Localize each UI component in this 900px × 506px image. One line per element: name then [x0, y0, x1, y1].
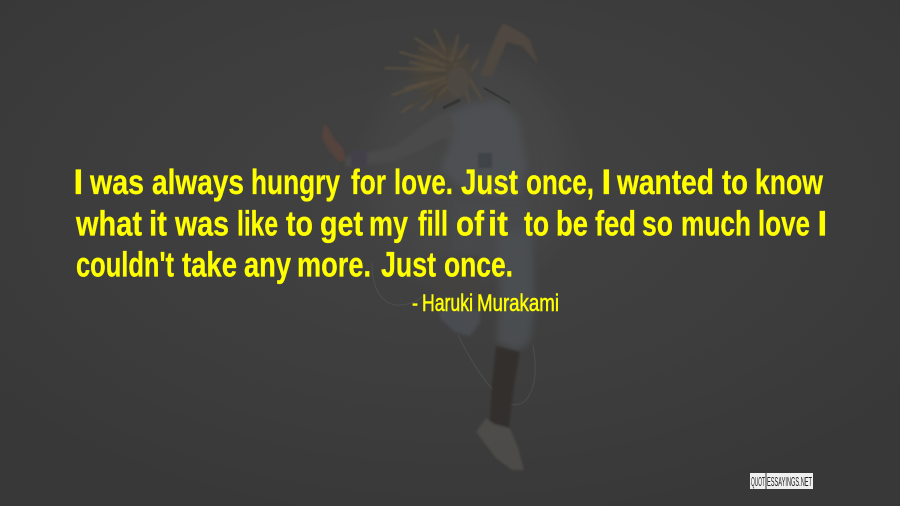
watermark logo: [750, 473, 813, 489]
soft glow behind dancer: [370, 55, 570, 285]
line 1: I: [602, 163, 611, 202]
line 1: for: [351, 163, 386, 202]
left arm: [345, 112, 456, 167]
figure: jumping dancer: [322, 23, 570, 470]
jump rope: [372, 262, 535, 405]
line 2: like: [237, 204, 278, 244]
line 2: so: [642, 204, 673, 244]
line 3: Just: [381, 246, 436, 284]
line 2: much: [681, 204, 751, 244]
line 2: was: [174, 204, 229, 244]
attribution: -: [412, 290, 418, 317]
line 2: fed: [595, 204, 636, 244]
line 2: to: [524, 204, 549, 244]
line 3: more.: [297, 246, 371, 284]
line 3: couldn't: [76, 246, 174, 284]
shorts: right: [497, 228, 535, 351]
wristband: [351, 150, 367, 166]
quote text: [74, 163, 827, 284]
hip: [450, 198, 532, 262]
line 2: my: [369, 204, 408, 244]
line 3: any: [244, 246, 291, 284]
line 1: Just: [461, 163, 518, 202]
neck strap: [484, 88, 510, 103]
quote poster: ESSAYINGS.NET: [767, 474, 812, 489]
line 3: [76, 246, 513, 284]
line 3: once.: [444, 246, 513, 284]
watermark logo: QUOT: [751, 474, 765, 489]
shorts: left: [440, 306, 480, 336]
line 2: fill: [418, 204, 448, 244]
line 2: be: [556, 204, 588, 244]
line 1: was: [89, 163, 144, 202]
line 2: love: [758, 204, 810, 244]
line 1: wanted: [616, 163, 714, 202]
line 2: it: [488, 204, 508, 244]
line 2: what: [75, 204, 142, 244]
line 2: get: [320, 204, 363, 244]
upper thigh: [423, 255, 480, 310]
hair: [385, 30, 482, 112]
line 1: hungry: [251, 163, 340, 202]
hand: [322, 124, 346, 162]
face: [447, 67, 469, 97]
line 2: it: [149, 204, 167, 244]
line 1: always: [152, 163, 244, 202]
line 2: of: [456, 204, 484, 244]
line 1: to: [722, 163, 748, 202]
attribution: [412, 290, 559, 317]
music player: [478, 153, 492, 168]
shoe: [476, 418, 524, 470]
line 1: [74, 163, 824, 202]
attribution: Haruki: [422, 290, 473, 317]
line 2: I: [818, 204, 827, 244]
torso: [432, 100, 527, 200]
line 1: once,: [526, 163, 594, 202]
attribution: Murakami: [477, 290, 559, 317]
line 1: love.: [394, 163, 453, 202]
line 2: [75, 204, 827, 244]
calf: [490, 346, 520, 430]
line 1: know: [755, 163, 824, 202]
raised arm: [480, 23, 538, 76]
line 3: take: [182, 246, 237, 284]
line 2: to: [286, 204, 313, 244]
line 1: I: [74, 163, 83, 202]
